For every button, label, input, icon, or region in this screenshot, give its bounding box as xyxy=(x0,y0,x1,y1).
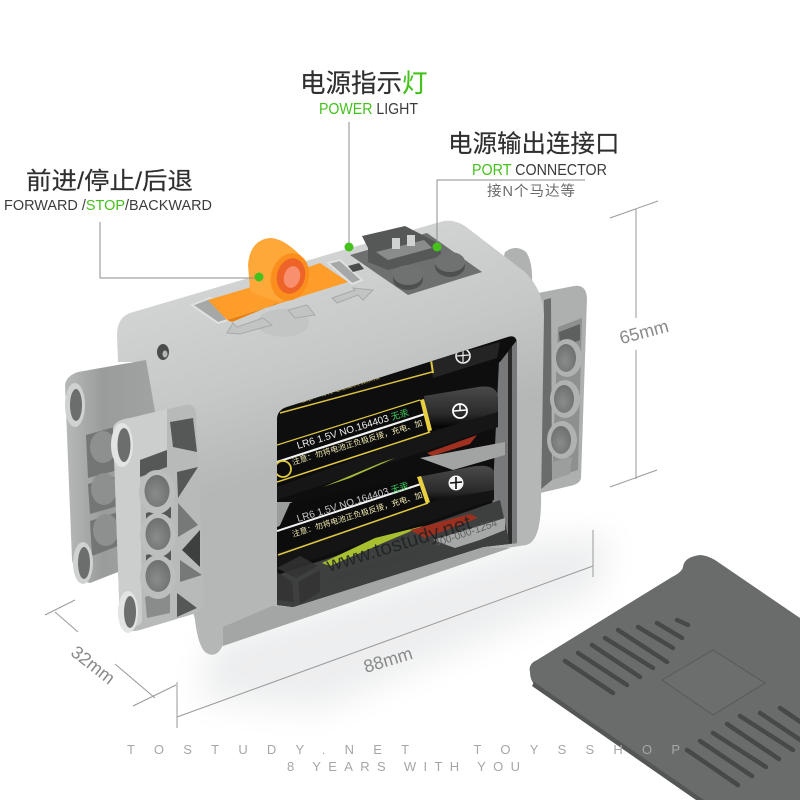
battery 3 xyxy=(277,466,494,556)
battery 3: 注意：勿将电池正负极反接，充电、加 xyxy=(291,490,424,539)
status slot xyxy=(348,263,364,272)
left back end plate xyxy=(65,360,160,584)
watermark site text xyxy=(323,512,499,586)
arrow marks xyxy=(227,288,373,334)
plate recesses xyxy=(140,418,202,618)
battery 1: 注意：勿将电池正负极反接 xyxy=(298,372,381,405)
callout: forward stop backward: 前进/停止/后退 xyxy=(26,168,193,195)
orange lever xyxy=(248,238,310,302)
watermark logo xyxy=(277,556,320,604)
battery 2: LR6 1.5V NO.164403 无汞 xyxy=(296,407,410,452)
watermark site text: www.tostudy.net xyxy=(323,512,474,577)
back plate pin ends xyxy=(65,383,85,427)
callout: power light: POWER LIGHT xyxy=(319,101,418,118)
connector plate xyxy=(350,233,482,295)
compartment right wall xyxy=(492,336,517,546)
callout: forward stop backward xyxy=(4,168,264,282)
top controls xyxy=(192,226,482,337)
battery 2 xyxy=(277,386,498,483)
battery 3 reflections xyxy=(322,514,478,566)
callout: forward stop backward: FORWARD /STOP/BACKWARD xyxy=(4,198,212,214)
watermark site text: 400-000-1254 xyxy=(433,517,499,550)
battery compartment xyxy=(277,336,517,607)
watermark site text: 图易得图片实拍 盗图投诉： xyxy=(327,544,429,586)
orange slider base xyxy=(208,263,348,320)
callout: port connector: 接N个马达等 xyxy=(487,182,575,200)
power box body xyxy=(117,221,544,655)
slider recess left xyxy=(192,298,228,323)
battery 2 reflections xyxy=(323,435,477,487)
cover square mark xyxy=(662,650,765,715)
battery 2: 注意：勿将电池正负极反接，充电、加 xyxy=(291,418,424,467)
footer brand line: TOSTUDY.NET TOYSSHOP xyxy=(127,742,680,757)
footer tagline: 8 YEARS WITH YOU xyxy=(287,759,520,774)
plate pin ends xyxy=(111,423,133,467)
dimension: 88mm width: 88mm xyxy=(361,643,415,677)
floor shadow xyxy=(200,535,610,710)
right end plate xyxy=(536,286,587,494)
callout: power light: 电源指示灯 xyxy=(300,70,428,98)
callout: port connector xyxy=(432,130,620,252)
lever shadow xyxy=(257,309,309,337)
slider recess right xyxy=(328,260,362,284)
right plate sockets xyxy=(552,339,582,377)
compartment shelf xyxy=(420,442,505,470)
dimension: 32mm depth xyxy=(45,600,176,706)
dimension: 88mm width xyxy=(177,530,593,728)
screw xyxy=(157,344,169,360)
battery 3: LR6 1.5V NO.164403 无汞 xyxy=(296,480,410,525)
cover slots xyxy=(565,620,800,785)
battery 1 xyxy=(277,336,516,420)
callout: power light xyxy=(300,70,428,252)
lower body strip xyxy=(223,547,510,646)
battery cover xyxy=(530,555,800,800)
left front end plate xyxy=(111,405,204,633)
dimension: 65mm height xyxy=(610,201,671,487)
connector studs xyxy=(393,268,423,290)
callout: port connector: PORT CONNECTOR xyxy=(472,162,607,179)
plate sockets xyxy=(139,470,175,514)
dimension: 65mm height: 65mm xyxy=(617,316,671,348)
compartment lower floor xyxy=(277,500,510,612)
dimension: 32mm depth: 32mm xyxy=(67,642,119,688)
callout: port connector: 电源输出连接口 xyxy=(448,130,620,158)
rear peg xyxy=(500,248,532,284)
